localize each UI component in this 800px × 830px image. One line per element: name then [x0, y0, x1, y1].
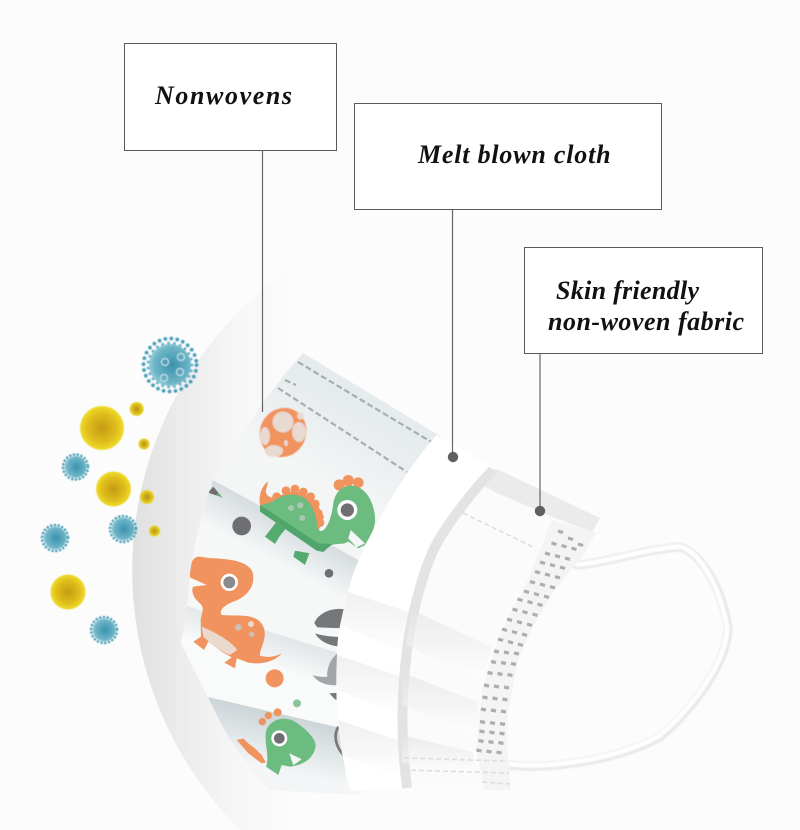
virus: large blue: [144, 338, 196, 392]
dino print: orange egg: [258, 407, 307, 458]
fold shading: middle layer: [337, 592, 415, 778]
label: Skin friendly non-woven fabric: non-woven fabric: [548, 307, 744, 336]
label: Melt blown cloth: Melt blown cloth: [417, 140, 611, 169]
perforated edge dots: [476, 531, 583, 753]
label: Nonwovens: [124, 44, 336, 412]
dino print: dots and grey dinosaur: [266, 609, 345, 757]
label: Skin friendly non-woven fabric: [524, 248, 762, 516]
virus: small blue group: [42, 454, 136, 643]
grey seam stripe: [402, 470, 493, 788]
mask middle white layer: [336, 435, 500, 790]
pleat shading: [402, 610, 492, 775]
dino print: grey dots: [232, 517, 333, 578]
mask inner skin-friendly layer: [400, 468, 600, 790]
mask outer printed layer: [181, 353, 440, 794]
ear loop: [510, 546, 728, 766]
dino print: orange dinosaur: [190, 557, 282, 668]
pollen: yellow spheres: [50, 402, 160, 610]
virus and pollen particles: [42, 338, 196, 643]
stitching: [403, 513, 533, 784]
label: Skin friendly non-woven fabric: Skin friendly: [556, 276, 699, 305]
label: Melt blown cloth: [354, 104, 662, 462]
stitching lines: [278, 362, 433, 472]
label: Nonwovens: Nonwovens: [154, 81, 294, 110]
grey crescent backdrop: [132, 262, 320, 830]
dino print: green dinosaur: [208, 475, 375, 565]
top band: [478, 469, 600, 532]
dino print: lower green dinosaur: [237, 708, 316, 775]
